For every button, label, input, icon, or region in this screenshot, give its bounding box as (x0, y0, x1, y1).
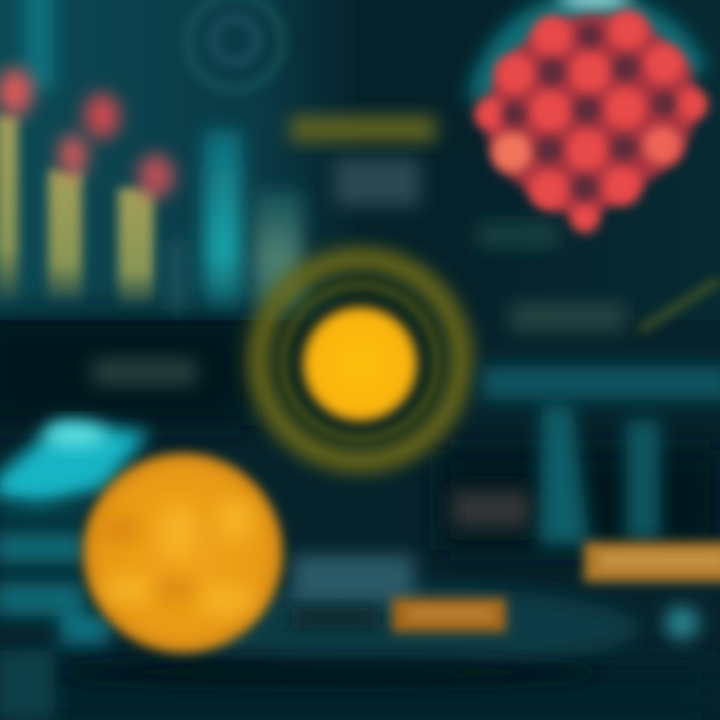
teal bar 5 (204, 130, 242, 305)
sphere body (482, 14, 700, 222)
yellow ring with sun (259, 259, 461, 461)
left column (538, 405, 590, 545)
green bar 6 (254, 190, 302, 305)
panel: teal stripes at left (0, 505, 110, 720)
right column (626, 420, 660, 540)
outer ring (259, 259, 461, 461)
text block: small label under sphere (478, 222, 558, 248)
dark centre (296, 298, 424, 426)
teal halo (466, 0, 708, 110)
panel: teal bridge (482, 366, 720, 545)
pale top highlight (559, 0, 631, 10)
inner ring (284, 286, 436, 438)
orange label: right (584, 542, 720, 582)
bar 2 (48, 170, 82, 300)
bar 3 (118, 188, 154, 303)
teal top bar (24, 0, 54, 90)
red dotted sphere (466, 0, 708, 233)
caption lines (92, 358, 197, 386)
red marker 1 (0, 68, 33, 116)
icon: faint target ring (188, 0, 282, 89)
icon: cyan tile (0, 422, 150, 506)
small bar 4 (165, 240, 189, 310)
sun disc (303, 307, 417, 421)
red marker 3 (58, 134, 88, 176)
heading: olive label (290, 116, 436, 142)
text block: dim brown label (452, 490, 530, 528)
text block: grey label (335, 158, 420, 206)
orange label: centre (392, 598, 506, 632)
bright red lobes (474, 10, 708, 233)
red marker 4 (138, 154, 174, 198)
arrow: olive diagonal line (640, 280, 720, 330)
red marker 2 (84, 93, 120, 139)
dark dots (502, 23, 676, 201)
orange coin (83, 453, 283, 653)
bar chart: rising bars with red markers (0, 0, 302, 386)
platform: lower ellipse (60, 555, 640, 686)
text block: label right of ring (510, 302, 625, 332)
bar 1 (0, 115, 18, 300)
icon: small teal dot (665, 606, 699, 640)
horizontal beam (482, 366, 720, 400)
